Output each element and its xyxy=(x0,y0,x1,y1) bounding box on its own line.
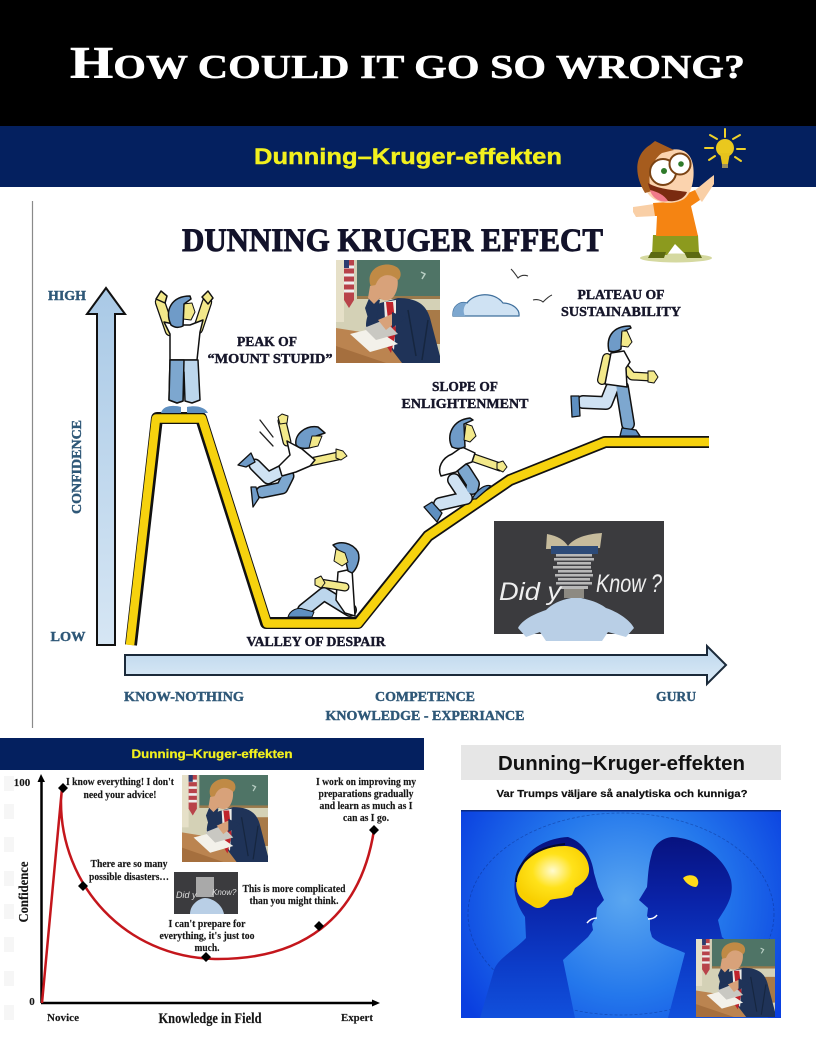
annotations: I know everything! I don't xyxy=(66,777,174,788)
stage labels: “MOUNT STUPID” xyxy=(208,351,333,366)
right mouth xyxy=(648,915,657,919)
axis labels xyxy=(48,288,696,723)
large yellow brain xyxy=(516,846,589,908)
panel: lower left chart xyxy=(0,738,424,1027)
navy band with subtitle xyxy=(0,126,816,187)
blue background xyxy=(461,810,781,1018)
band heading: Dunning–Kruger-effekten xyxy=(254,144,562,169)
stage labels: PLATEAU OF xyxy=(578,287,664,302)
confidence curve xyxy=(130,418,709,645)
axis labels: 0 xyxy=(29,996,35,1008)
right head xyxy=(639,837,768,1018)
stage labels: SLOPE OF xyxy=(432,379,498,394)
question: Var Trumps väljare så analytiska och kunniga? xyxy=(496,788,748,800)
banner heading: Dunning–Kruger-effekten xyxy=(132,747,292,761)
photo: man at desk xyxy=(336,260,440,363)
annotations: I can't prepare for xyxy=(168,919,246,930)
axis labels: Confidence xyxy=(17,862,32,922)
icon: cartoon boy xyxy=(633,141,714,262)
data markers xyxy=(58,783,379,962)
axis labels xyxy=(14,777,373,1027)
axis labels: Expert xyxy=(341,1012,373,1024)
axis labels: HIGH xyxy=(48,288,87,303)
figure: arms raised on the peak xyxy=(156,291,213,413)
chart title: DUNNING KRUGER EFFECT xyxy=(182,223,603,259)
annotations: much. xyxy=(194,943,220,954)
axis labels: GURU xyxy=(656,689,696,704)
stage labels: VALLEY OF DESPAIR xyxy=(246,634,386,649)
icon: light bulb xyxy=(705,129,745,168)
left head xyxy=(480,837,604,1018)
figure: running on plateau xyxy=(571,326,658,436)
axis labels: LOW xyxy=(50,629,86,644)
stage labels: PEAK OF xyxy=(237,334,297,349)
axis labels: Knowledge in Field xyxy=(158,1011,262,1027)
figure: falling xyxy=(238,414,347,507)
chalk words: Did y xyxy=(499,578,563,606)
annotations: need your advice! xyxy=(84,790,156,801)
photo: did you know xyxy=(174,872,238,914)
icon: cloud and birds xyxy=(453,269,552,316)
heading: Dunning−Kruger-effekten xyxy=(498,753,745,775)
banner xyxy=(0,738,424,770)
axis labels: Novice xyxy=(47,1012,79,1024)
stage labels xyxy=(208,287,681,649)
annotations: I work on improving my xyxy=(316,777,417,788)
axes xyxy=(41,778,377,1003)
photo: did you know: Know? xyxy=(212,888,237,897)
stage labels: ENLIGHTENMENT xyxy=(402,396,528,411)
axis labels: 100 xyxy=(14,777,31,789)
photo: man at desk xyxy=(696,939,775,1017)
photo: did you know: Did y xyxy=(176,890,197,900)
confidence arrow xyxy=(87,288,125,645)
annotations: and learn as much as I xyxy=(320,801,412,812)
panel: main Dunning Kruger chart xyxy=(32,201,726,728)
axis labels: COMPETENCE xyxy=(375,689,475,704)
annotations: can as I go. xyxy=(343,813,389,824)
figure: climbing the slope xyxy=(424,418,507,522)
red curve xyxy=(42,788,374,1003)
photo: did you know chalkboard xyxy=(494,521,664,641)
axis labels: KNOW-NOTHING xyxy=(124,689,245,704)
annotations: There are so many xyxy=(90,859,168,870)
photo: man at desk xyxy=(182,775,268,862)
left mouth xyxy=(587,918,597,923)
small yellow brain xyxy=(683,875,698,887)
title: HOW COULD IT GO SO WRONG? xyxy=(70,38,745,88)
annotations: everything, it's just too xyxy=(160,931,254,942)
header banner xyxy=(0,0,816,126)
figure: sitting in valley xyxy=(288,543,359,617)
annotations: than you might think. xyxy=(250,896,339,907)
heading bar xyxy=(461,745,781,780)
axis labels: KNOWLEDGE - EXPERIANCE xyxy=(326,708,524,723)
annotations: preparations gradually xyxy=(318,789,414,800)
knowledge arrow xyxy=(125,646,726,684)
annotations: possible disasters… xyxy=(89,872,169,883)
annotations xyxy=(66,777,417,954)
panel: lower right brains xyxy=(461,745,781,1018)
chalk words: Know ? xyxy=(596,570,662,598)
annotations: This is more complicated xyxy=(242,884,346,895)
stage labels: SUSTAINABILITY xyxy=(561,304,681,319)
axis labels: CONFIDENCE xyxy=(69,420,84,514)
chalk words xyxy=(499,570,662,606)
